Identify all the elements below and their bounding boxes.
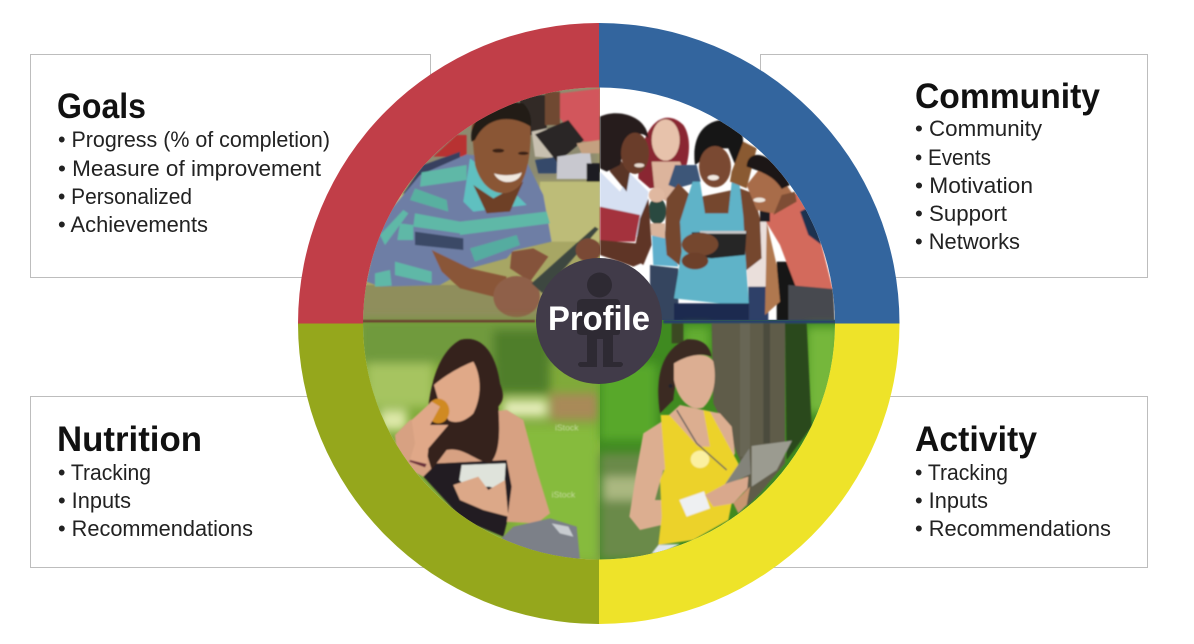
panel: goals [30,54,430,278]
icon: person silhouette [577,272,623,367]
photo: woman eating an apple with tablet: iStock [552,490,576,500]
list: activity: • Recommendations [915,516,1111,541]
list: goals: • Measure of improvement [58,156,321,181]
photo disc [360,85,840,560]
ring: green nutrition quadrant [298,324,600,624]
list: community [915,116,1042,254]
list: nutrition: • Inputs [58,488,131,513]
panel: nutrition [30,396,430,568]
list: community: • Support [915,201,1007,226]
list: community: • Community [915,116,1042,141]
panel: community [760,54,1148,278]
list: activity [915,460,1111,541]
heading: goals: Goals [57,87,146,126]
list: community: • Motivation [915,173,1033,198]
photo: woman in yellow top with tablet by a tree [600,320,840,560]
list: goals: • Progress (% of completion) [58,127,330,152]
heading: community: Community [915,77,1101,116]
ring: red goals quadrant [298,23,599,324]
photo: woman eating an apple with tablet [360,320,600,560]
list: goals: • Achievements [58,212,208,237]
heading: activity: Activity [915,420,1038,459]
panel: activity [760,396,1148,568]
photo: smiling boy with tablet on grass [360,85,601,322]
ring: blue community quadrant [599,23,900,324]
label: profile: Profile [548,300,650,338]
list: activity: • Tracking [915,460,1008,485]
list: community: • Events [915,145,991,170]
list: goals: • Personalized [58,184,192,209]
profile badge [536,258,662,384]
heading: nutrition: Nutrition [57,420,202,459]
ring: yellow activity quadrant [599,324,900,624]
list: nutrition: • Tracking [58,460,151,485]
photo: woman eating an apple with tablet: iStock [555,423,579,433]
list: community: • Networks [915,229,1020,254]
list: goals [58,127,330,237]
list: nutrition [58,460,253,541]
photo: group of students reading a tablet [600,85,840,325]
list: activity: • Inputs [915,488,988,513]
list: nutrition: • Recommendations [58,516,253,541]
